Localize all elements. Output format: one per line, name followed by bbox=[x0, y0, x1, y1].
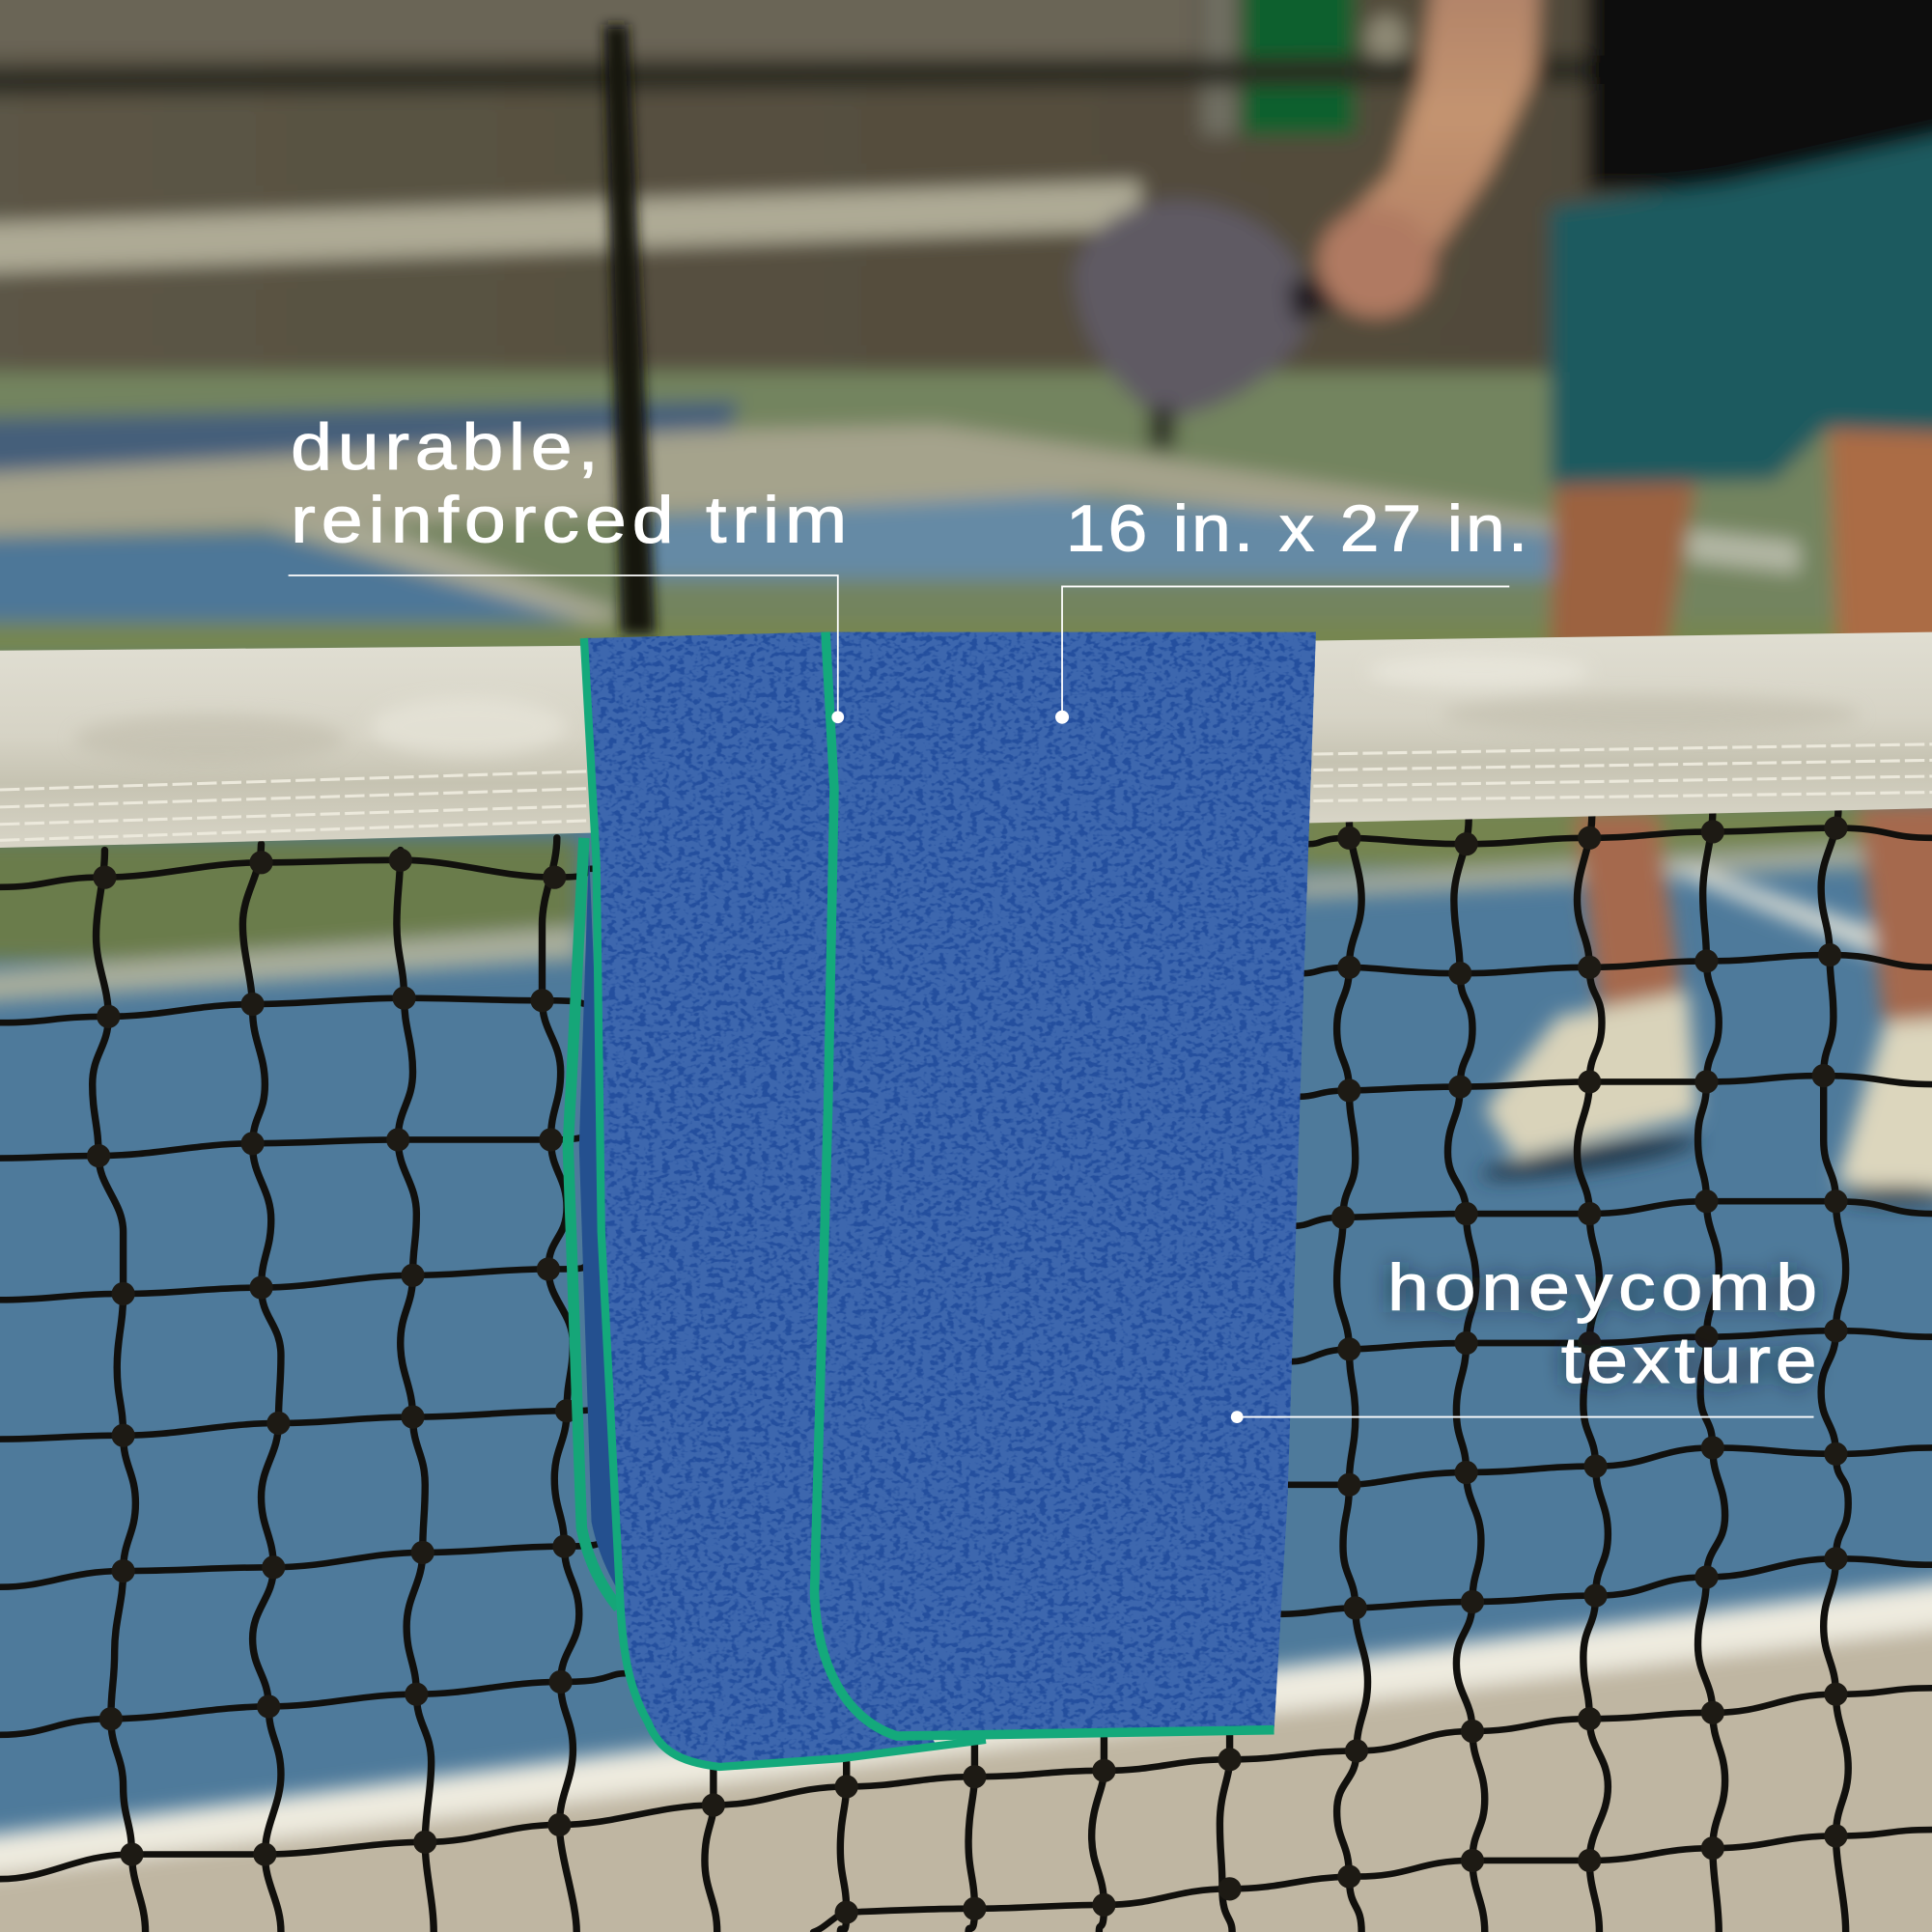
back panel trim bbox=[584, 638, 986, 1767]
rear hanging green edge bbox=[568, 838, 619, 1608]
lower court bbox=[0, 838, 579, 961]
leader line bbox=[1231, 1411, 1813, 1423]
horizontal strands bbox=[0, 828, 1932, 1932]
back towel panel bbox=[584, 632, 974, 1768]
far floor bbox=[0, 372, 1932, 653]
callout text: texture bbox=[1561, 1324, 1817, 1397]
net strands bbox=[0, 808, 1932, 1932]
callout: durable, reinforced trim bbox=[289, 411, 847, 723]
text shadow: honeycomb bbox=[1387, 1253, 1817, 1327]
leader line bbox=[289, 575, 844, 723]
towel bbox=[568, 632, 1316, 1768]
front panel trim bbox=[815, 632, 1274, 1736]
callout text: reinforced trim bbox=[291, 484, 847, 556]
vertical strands bbox=[93, 808, 1848, 1932]
net knots bbox=[87, 816, 1848, 1924]
text shadow: texture bbox=[1561, 1327, 1817, 1399]
text shadow bbox=[1387, 1253, 1817, 1399]
far net post bbox=[603, 25, 656, 634]
back wall bbox=[0, 0, 1932, 376]
net top rail bbox=[0, 632, 1932, 848]
player bbox=[1550, 483, 1695, 653]
callout text: durable, bbox=[291, 411, 599, 484]
callout text bbox=[1387, 1251, 1817, 1397]
callout: dimensions bbox=[1055, 491, 1527, 724]
callout text: honeycomb bbox=[1387, 1251, 1817, 1324]
leader line bbox=[1055, 586, 1509, 724]
dimensions text: 16 in. x 27 in. bbox=[1066, 491, 1527, 565]
callout: honeycomb texture bbox=[1231, 1251, 1817, 1423]
callout text bbox=[291, 411, 847, 556]
front towel panel bbox=[813, 632, 1316, 1736]
